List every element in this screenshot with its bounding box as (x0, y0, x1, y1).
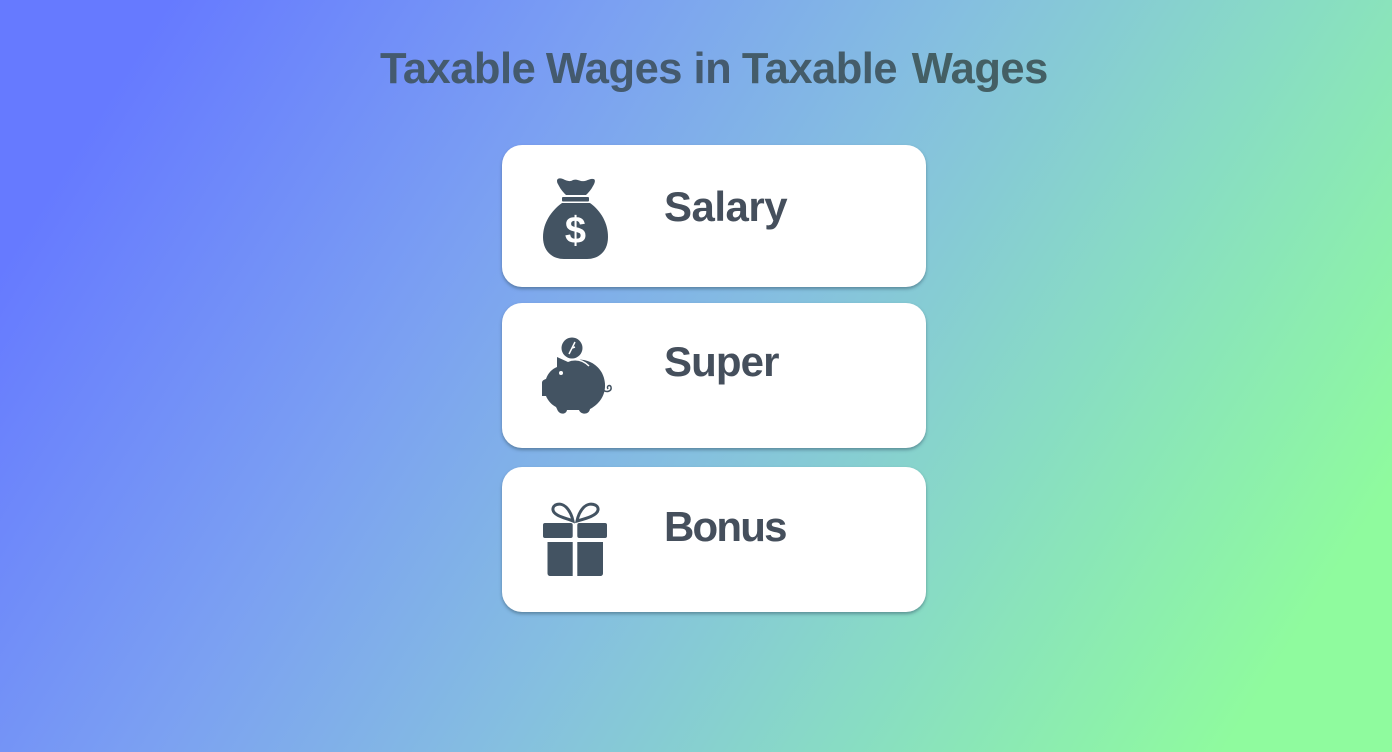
panel: super (502, 303, 926, 448)
panel: bonus (502, 467, 926, 612)
label: Bonus: Bonus (664, 503, 786, 550)
icon: money bag: $ (565, 210, 586, 252)
label: Salary: Salary (664, 183, 787, 230)
icon: money bag (543, 178, 608, 259)
label: Super: Super (664, 338, 779, 385)
title: Taxable Wages in Taxable Wages (380, 45, 1048, 93)
panel: salary (502, 145, 926, 287)
icon: gift box (543, 502, 607, 576)
icon: piggy bank with coin (542, 338, 612, 414)
